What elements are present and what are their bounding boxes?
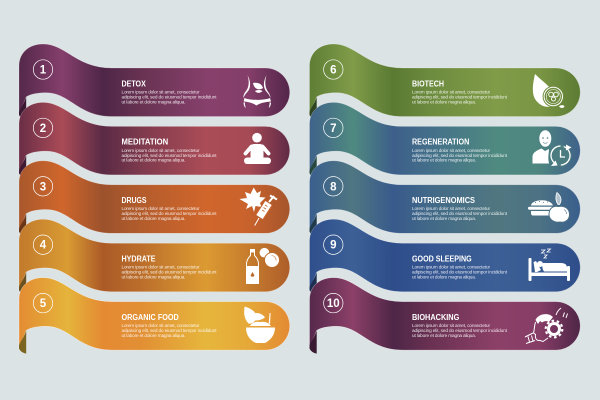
text block: Lorem ipsum dolor sit amet, consectetur	[412, 323, 490, 328]
number 6	[324, 60, 343, 79]
text block: adipiscing elit, sed do eiusmod tempor incididunt	[122, 328, 217, 333]
text block	[122, 148, 217, 163]
fold 4	[19, 272, 26, 295]
text block: adipiscing elit, sed do eiusmod tempor incididunt	[412, 270, 508, 275]
text block	[122, 206, 217, 221]
icon: meditation	[244, 133, 271, 164]
text block: Lorem ipsum dolor sit amet, consectetur	[122, 89, 200, 94]
text block: ut labore et dolore magna aliqua.	[412, 158, 476, 163]
ribbon 2	[19, 102, 290, 175]
text block: adipiscing elit, sed do eiusmod tempor incididunt	[412, 211, 508, 216]
number 8	[324, 177, 343, 196]
text block	[412, 89, 508, 104]
number 9	[324, 235, 343, 254]
icon: head with gear	[525, 308, 568, 344]
ribbon 1	[19, 44, 290, 116]
icon: waist with leaves	[243, 75, 271, 108]
text block: Lorem ipsum dolor sit amet, consectetur	[122, 323, 200, 328]
text block: adipiscing elit, sed do eiusmod tempor incididunt	[412, 328, 508, 333]
icon: leaf and molecule	[533, 74, 564, 108]
text block: Lorem ipsum dolor sit amet, consectetur	[122, 148, 200, 153]
panel: 9 good sleeping	[310, 219, 580, 295]
fold 6	[310, 97, 317, 120]
icon: bowl with leaves	[244, 306, 275, 343]
text block: ut labore et dolore magna aliqua.	[122, 99, 186, 104]
ribbon 10	[310, 278, 580, 350]
fold 2	[19, 155, 26, 178]
text block	[412, 265, 508, 280]
fold 9	[310, 272, 317, 295]
ribbon 4	[19, 219, 290, 292]
text block: Lorem ipsum dolor sit amet, consectetur	[412, 148, 490, 153]
text block: Lorem ipsum dolor sit amet, consectetur	[412, 265, 490, 270]
number 10: 10	[327, 298, 340, 310]
icon: bed and zzz	[528, 249, 570, 281]
heading: MEDITATION	[122, 138, 168, 147]
text block: ut labore et dolore magna aliqua.	[122, 158, 186, 163]
ribbon 7	[310, 102, 580, 175]
text block: adipiscing elit, sed do eiusmod tempor incididunt	[412, 153, 508, 158]
icon: burger and apple	[528, 192, 570, 222]
fold 10	[310, 331, 317, 354]
icon: person and clock	[532, 130, 573, 168]
number 10	[324, 293, 343, 313]
number 3: 3	[40, 181, 46, 193]
panel: 3 drugs	[19, 161, 290, 237]
number 2: 2	[40, 123, 46, 135]
heading: DETOX	[122, 79, 146, 88]
number 2	[33, 118, 53, 138]
ribbon 3	[19, 161, 290, 233]
text block: ut labore et dolore magna aliqua.	[412, 216, 476, 221]
text block: Lorem ipsum dolor sit amet, consectetur	[122, 206, 200, 211]
panel: 10 biohacking	[310, 278, 580, 354]
text block: Lorem ipsum dolor sit amet, consectetur	[412, 89, 490, 94]
text block: ut labore et dolore magna aliqua.	[122, 274, 186, 280]
ribbon 9	[310, 219, 580, 292]
text block: ut labore et dolore magna aliqua.	[122, 216, 186, 221]
number 8: 8	[330, 181, 337, 193]
heading: BIOHACKING	[412, 313, 459, 322]
text block: ut labore et dolore magna aliqua.	[122, 333, 186, 338]
number 1	[33, 60, 53, 79]
fold 8	[310, 214, 317, 237]
text block: Lorem ipsum dolor sit amet, consectetur	[412, 206, 490, 211]
heading: ORGANIC FOOD	[122, 313, 179, 322]
heading: HYDRATE	[122, 254, 156, 264]
number 9: 9	[330, 240, 337, 252]
number 7: 7	[330, 123, 337, 135]
number 5: 5	[40, 298, 47, 310]
heading: GOOD SLEEPING	[412, 254, 472, 264]
heading: REGENERATION	[412, 138, 469, 147]
number 4	[33, 235, 53, 254]
heading: BIOTECH	[412, 79, 444, 88]
number 4: 4	[40, 240, 47, 252]
text block: ut labore et dolore magna aliqua.	[412, 333, 476, 338]
text block: adipiscing elit, sed do eiusmod tempor incididunt	[412, 94, 508, 99]
panel: 5 organic food	[19, 278, 290, 354]
icon: bottle and pills	[246, 248, 280, 284]
text block	[412, 323, 508, 338]
text block	[412, 148, 508, 163]
panel: 4 hydrate	[19, 219, 290, 295]
text block	[122, 323, 217, 338]
panel: 2 meditation	[19, 102, 290, 178]
panel: 1 detox	[19, 44, 290, 120]
text block: adipiscing elit, sed do eiusmod tempor incididunt	[122, 94, 217, 99]
text block: adipiscing elit, sed do eiusmod tempor incididunt	[122, 270, 217, 275]
ribbon 8	[310, 161, 580, 233]
panel: 6 biotech	[310, 44, 580, 120]
text block	[122, 89, 217, 104]
text block: ut labore et dolore magna aliqua.	[412, 99, 476, 104]
text block: Lorem ipsum dolor sit amet, consectetur	[122, 265, 200, 270]
icon: cannabis and syringe	[240, 188, 277, 226]
ribbon 5	[19, 278, 290, 350]
number 1: 1	[40, 64, 47, 76]
panel: 7 regeneration	[310, 102, 580, 178]
panel: 8 nutrigenomics	[310, 161, 580, 237]
fold 1	[19, 97, 26, 120]
text block: ut labore et dolore magna aliqua.	[412, 274, 476, 280]
text block: adipiscing elit, sed do eiusmod tempor incididunt	[122, 153, 217, 158]
fold 7	[310, 155, 317, 178]
ribbon 6	[310, 44, 580, 116]
text block: adipiscing elit, sed do eiusmod tempor incididunt	[122, 211, 217, 216]
number 6: 6	[330, 64, 337, 76]
fold 3	[19, 214, 26, 237]
number 7	[324, 118, 343, 138]
text block	[412, 206, 508, 221]
heading: NUTRIGENOMICS	[412, 196, 476, 205]
number 5	[33, 293, 53, 313]
fold 5	[19, 331, 26, 354]
text block	[122, 265, 217, 280]
heading: DRUGS	[122, 196, 147, 205]
number 3	[33, 177, 53, 196]
